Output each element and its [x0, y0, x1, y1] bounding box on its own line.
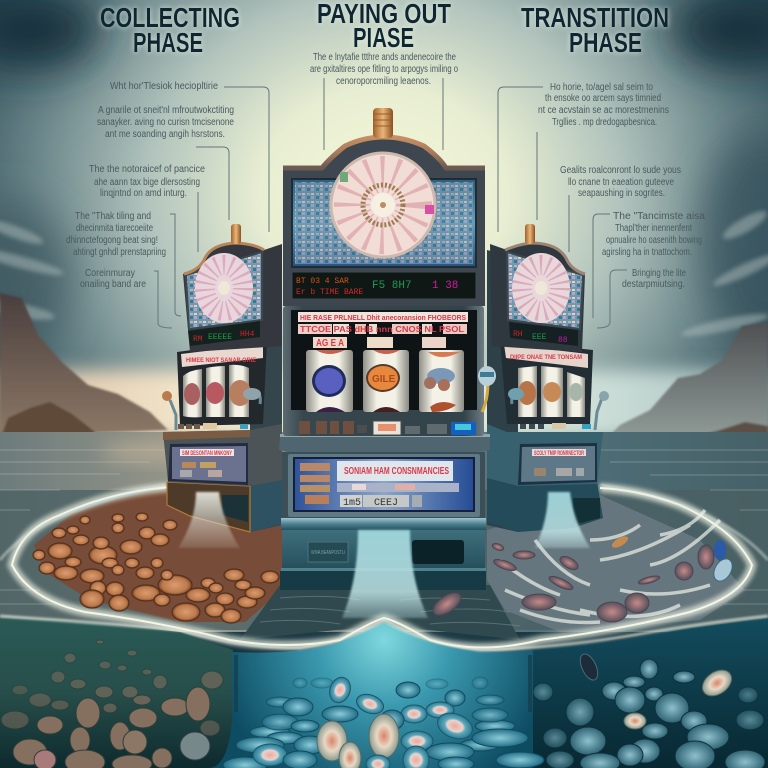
- title: paying out phase: PIASE: [353, 22, 414, 53]
- left column annotations: A gnarile ot sneit'nl mfroutwokctiting: [98, 105, 234, 116]
- left column annotations: ahe aann tax bige dlersosting: [94, 177, 200, 188]
- right machine lever: [512, 393, 602, 430]
- left column annotations: linqjntnd on amd inturg.: [100, 188, 187, 199]
- title: paying out phase: [317, 0, 451, 53]
- title: transition phase: TRANSTITION: [521, 2, 669, 33]
- right column annotations: opnualire ho oasenith bowing: [606, 235, 702, 246]
- cloud streaks: [0, 206, 768, 340]
- right column annotations: seapaushing in sogrites.: [578, 188, 665, 199]
- title: collecting phase: PHASE: [133, 27, 203, 58]
- left machine knob: [231, 224, 241, 244]
- left slot machine: HH4: [240, 330, 255, 339]
- center machine display labels: SONIAM HAM CONSNMANCIES: [344, 466, 449, 477]
- underwater panel: transition: [532, 618, 768, 768]
- title: transition phase: [521, 2, 669, 58]
- center machine upper cabinet: [283, 306, 484, 436]
- center column annotation: [310, 52, 458, 87]
- right column annotations: th ensoke oo arcem says timnied: [545, 93, 661, 104]
- left slot machine: [162, 224, 282, 532]
- right column annotations: Gealits roalconront lo sude yous: [560, 165, 681, 176]
- sunken copper coins: [1, 640, 223, 768]
- sunken teal coins: [223, 674, 544, 768]
- left slot machine: EEEEE: [208, 333, 232, 342]
- center machine score strip: F5 8H7: [372, 280, 412, 292]
- right slot machine: RH: [513, 330, 523, 339]
- left machine score strip: [188, 321, 260, 346]
- left column annotations: [66, 81, 234, 290]
- underwater panel: paying out: [208, 622, 544, 768]
- left column annotations: ahtingt gnhdl prenstapriing: [73, 247, 166, 258]
- right machine belly: [487, 424, 603, 486]
- center dark water: [240, 585, 520, 640]
- left column annotations: The the notoraicef of pancice: [89, 164, 205, 175]
- grey coins in right waves: [429, 534, 736, 622]
- center machine score strip: Er b TIME BARE: [296, 288, 363, 297]
- underwater panel: collecting: [0, 618, 233, 768]
- left column annotations: The "Thak tiling and: [75, 211, 151, 222]
- right column annotations: Trgllies . mp dredogapbesnica.: [552, 117, 657, 128]
- center machine label rows: TTCOE PAS dHB nnn CNOS NL PSOL: [300, 325, 464, 334]
- right machine wheel: [512, 253, 570, 323]
- left column annotations: Coreinmuray: [85, 268, 135, 279]
- right machine score strip: [509, 322, 578, 346]
- center machine reel 2: [363, 350, 409, 412]
- center machine base: [280, 530, 486, 590]
- sunken steel coins: [533, 651, 765, 768]
- title: collecting phase: COLLECTING: [100, 2, 240, 33]
- right column annotations: agirsling ha in tnattochom.: [602, 247, 692, 258]
- left slot machine: RM: [193, 335, 203, 344]
- mountains left: [0, 293, 168, 458]
- right column annotations: [538, 82, 705, 290]
- left shallow copper pool: [34, 488, 282, 622]
- center machine vent and plate: [308, 542, 348, 562]
- center machine display labels: [300, 461, 459, 509]
- right wave streaks: [500, 510, 720, 622]
- left column annotations: dhinnctefogong beat sing!: [66, 235, 158, 246]
- right column annotations: The "Tancimste aisa: [613, 211, 705, 222]
- right column annotations: llo cnane tn eaeation guteeve: [568, 177, 674, 188]
- left column annotations: ant me soanding angih hsrstons.: [105, 129, 225, 140]
- center machine score strip: [292, 272, 476, 299]
- water surface and foam: [0, 485, 768, 648]
- right slot machine: [487, 224, 609, 532]
- center machine buttons: [299, 421, 476, 435]
- center slot machine: [279, 108, 496, 590]
- right slot machine: SCOLY TMIP RONRNECTOR: [534, 451, 584, 457]
- center machine trim: [281, 518, 486, 530]
- left machine buttons: [178, 424, 200, 429]
- center machine belly: [282, 452, 485, 518]
- left machine reel panel: [177, 340, 267, 426]
- center machine score strip: 1 38: [432, 280, 458, 292]
- sea: [0, 432, 768, 632]
- center machine shelf: [279, 436, 490, 452]
- right column annotations: Ho horie, to/agel sal seim to: [550, 82, 653, 93]
- center machine display labels: CEEJ: [374, 498, 398, 509]
- left column annotations: onailing band are: [80, 279, 146, 290]
- center machine label rows: HIE RASE PRLNELL Dhit anecoransion FHOBEORS: [300, 315, 466, 322]
- right machine base: [487, 478, 603, 532]
- center machine reel 3: [419, 350, 464, 412]
- center machine reel 2: GILE: [372, 374, 396, 385]
- leader lines: [154, 78, 627, 328]
- right machine reels: [518, 366, 537, 417]
- center machine lever: [478, 366, 496, 412]
- right foamy pool: [487, 495, 745, 632]
- title: transition phase: PHASE: [569, 27, 642, 58]
- center column annotation: cenoroporcmiling leaenos.: [336, 76, 431, 87]
- waterfalls: [178, 492, 590, 618]
- right slot machine: EEE: [532, 333, 547, 342]
- left column annotations: dhecinmita tiarecoeiite: [76, 223, 153, 234]
- right slot machine: DIIPE ONAE TNE TONSAM: [510, 355, 582, 361]
- sunken foam edge: [0, 616, 768, 650]
- right column annotations: nt ce acvstain se ac morestrnenins: [538, 105, 669, 116]
- right machine reel panel: [500, 340, 593, 424]
- left slot machine: SIM DESONTAN MNKONY: [182, 451, 232, 457]
- right column annotations: destarpmiutsing.: [622, 279, 685, 290]
- right slot machine: 88: [558, 336, 568, 345]
- left machine wheel: [195, 253, 253, 323]
- right machine buttons: [520, 424, 544, 429]
- center machine label rows: [298, 312, 468, 349]
- center machine label rows: AG E A: [316, 338, 344, 349]
- center machine reel 1: [306, 350, 353, 412]
- center machine screen: [292, 179, 476, 267]
- right column annotations: Thapl'ther inennenfent: [615, 223, 692, 234]
- left machine shelf: [163, 430, 250, 440]
- center column annotation: are gxitaltires ope fitling to arpogys imiling o: [310, 64, 458, 75]
- center machine display labels: 1m5: [343, 498, 361, 509]
- left machine side cabinet: [250, 250, 282, 532]
- right machine knob: [525, 224, 535, 244]
- left machine belly: [163, 424, 282, 486]
- center machine score strip: BT 03 4 SAR: [296, 277, 349, 286]
- left machine lever: [170, 392, 260, 430]
- foam outline: [12, 487, 752, 648]
- left column annotations: sanayker. aving no curisn tmcisenone: [97, 117, 234, 128]
- title: collecting phase: [100, 2, 240, 58]
- right machine top cabinet: [490, 243, 585, 352]
- left machine reels: [183, 369, 202, 417]
- right machine side cabinet: [487, 250, 518, 532]
- mountains right: [605, 322, 768, 462]
- left column annotations: Wht hor'Tlesiok heciopltirie: [110, 81, 218, 92]
- center slot machine: WIVA BEANPOSTLI: [311, 550, 345, 556]
- center machine wheel: [331, 153, 435, 257]
- copper coins on surface: [33, 513, 279, 623]
- left machine top cabinet: [183, 243, 282, 352]
- left machine base: [167, 478, 282, 532]
- center column annotation: The e lnytafie ttthre ands andenecoire the: [313, 52, 456, 63]
- center machine knob: [373, 108, 393, 138]
- center machine top cabinet: [283, 137, 485, 306]
- left slot machine: HIMEE NIOT SANAR ORIE: [186, 358, 256, 364]
- right column annotations: Bringing the lite: [632, 268, 686, 279]
